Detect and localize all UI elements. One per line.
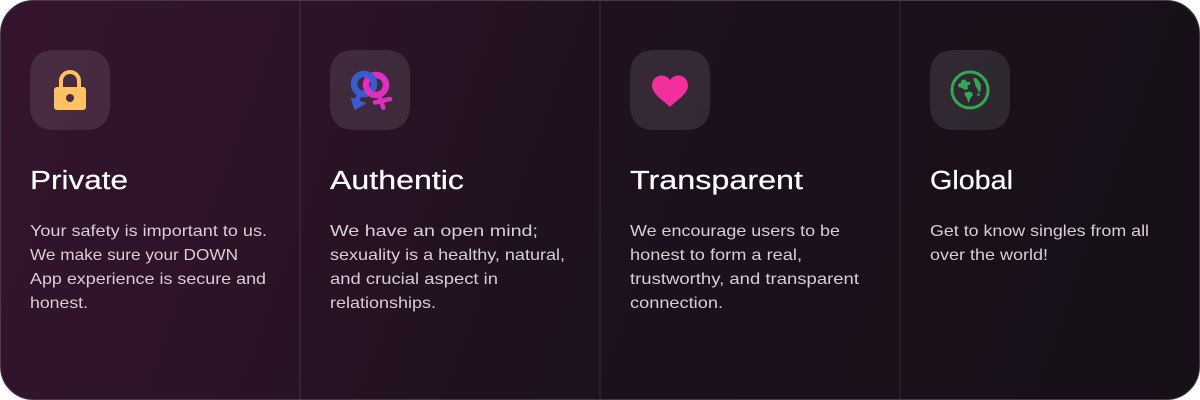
text block: Private description: We make sure your DOWN — [30, 247, 238, 264]
text block: Private description — [30, 223, 267, 312]
text block: Transparent description: trustworthy, and transparent — [630, 271, 860, 288]
text block: Authentic description — [330, 223, 565, 312]
text block: Authentic description: sexuality is a healthy, natural, — [330, 247, 565, 264]
text block: Global description: over the world! — [930, 247, 1048, 264]
text block: Transparent description: honest to form a real, — [630, 247, 802, 264]
heading: Private: Private — [30, 167, 128, 195]
icon: padlock — [30, 50, 110, 130]
heading: Authentic: Authentic — [330, 167, 464, 195]
panel: Authentic — [330, 50, 565, 312]
panel: Transparent — [630, 50, 860, 312]
heading: Global: Global — [930, 167, 1013, 195]
text block: Private description: Your safety is important to us. — [30, 223, 267, 240]
panel: Private — [30, 50, 267, 312]
text block: Transparent description — [630, 223, 860, 312]
text block: Global description: Get to know singles from all — [930, 223, 1149, 240]
heading: Transparent: Transparent — [630, 167, 803, 195]
icon: heart — [630, 50, 710, 130]
icon: interlinked gender symbols — [330, 50, 410, 130]
panel: Global — [930, 50, 1149, 264]
text block: Authentic description: relationships. — [330, 295, 436, 312]
text block: Transparent description: connection. — [630, 295, 723, 312]
text block: Private description: App experience is secure and — [30, 271, 266, 288]
text block: Private description: honest. — [30, 295, 88, 312]
text block: Global description — [930, 223, 1149, 264]
text block: Authentic description: and crucial aspect in — [330, 271, 498, 288]
text block: Transparent description: We encourage users to be — [630, 223, 840, 240]
text block: Authentic description: We have an open mind; — [330, 223, 538, 240]
icon: globe — [930, 50, 1010, 130]
